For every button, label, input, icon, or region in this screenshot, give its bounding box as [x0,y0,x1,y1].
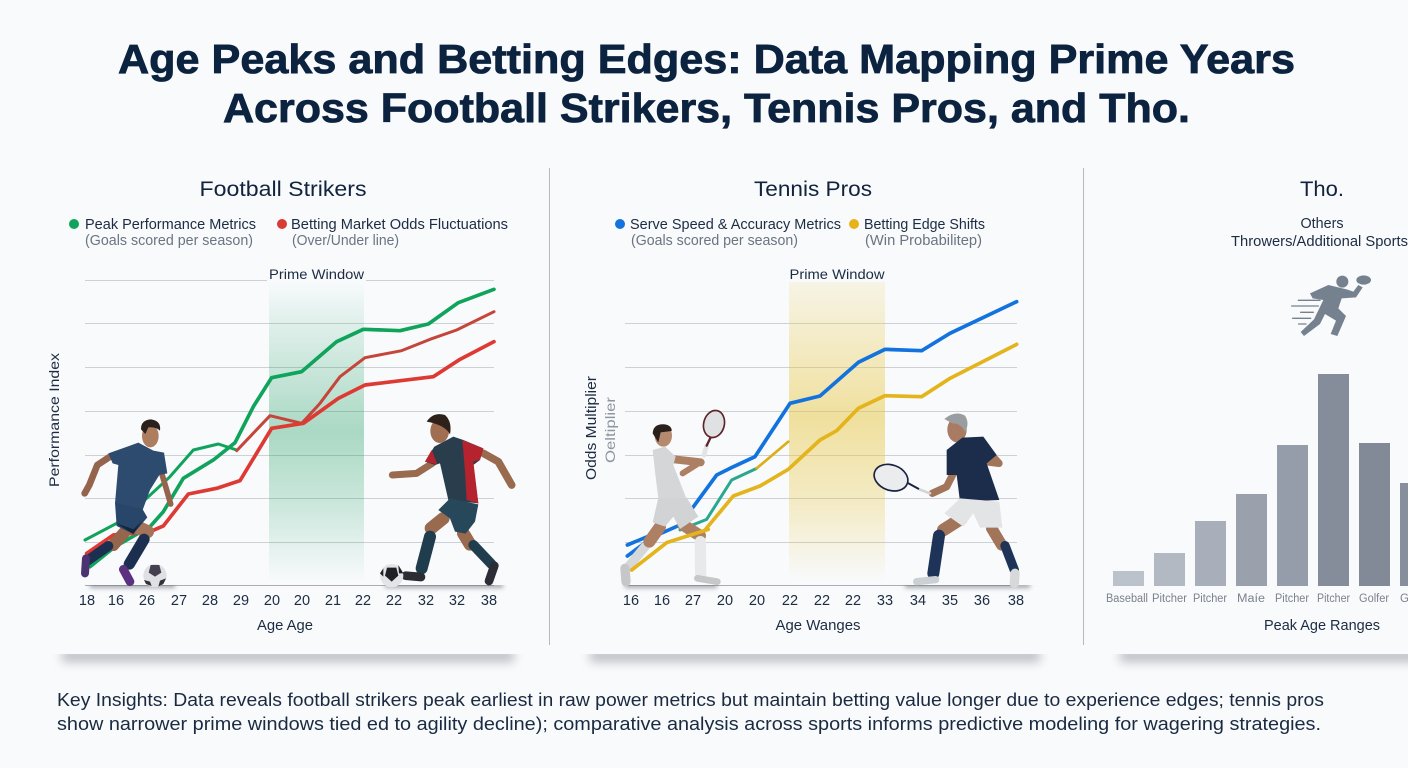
x axis ticks: football: 26 [139,593,155,609]
player: right striker [392,414,512,581]
legend: football: Peak Performance Metrics [85,217,256,233]
legend: football: (Goals scored per season) [85,233,253,249]
x axis ticks: tennis [623,593,1024,609]
legend: tennis: Betting Edge Shifts [864,217,985,233]
x axis ticks: football: 21 [325,593,341,609]
player: veteran tennis pro [870,413,1015,583]
legend: football: (Over/Under line) [292,233,399,249]
gridlines [625,324,1017,586]
x axis ticks: tennis: 16 [654,593,670,609]
bar labels: Baseball [1106,593,1148,605]
x axis title: peak age ranges: Peak Age Ranges [1264,618,1380,634]
bar labels: Pitcher [1152,593,1187,605]
legend: tennis: (Goals scored per season) [631,233,798,249]
player: young tennis pro [625,408,727,582]
bar chart: peak age ranges [1113,374,1408,586]
title: Across Football Strikers, Tennis Pros, and Tho. [223,85,1190,131]
panel: tennis pros [584,178,1040,662]
x axis ticks: football [79,593,497,609]
x axis ticks: football: 38 [481,593,497,609]
x axis ticks: tennis: 22 [845,593,861,609]
x axis ticks: football: 32 [449,593,465,609]
legend: tennis [615,217,985,249]
x axis ticks: tennis: 36 [974,593,990,609]
heading: tennis pros: Tennis Pros [754,178,872,201]
x axis ticks: tennis: 27 [685,593,701,609]
title [118,36,1295,131]
panel: football strikers [46,178,514,662]
y axis label: performance index: Performance Index [46,353,62,487]
x axis ticks: football: 22 [386,593,402,609]
x axis ticks: tennis: 20 [749,593,765,609]
legend: tennis: (Win Probabilitep) [865,233,982,249]
icon: soccer ball left [143,564,167,587]
x axis ticks: tennis: 22 [782,593,798,609]
icon: running thrower [1292,275,1371,336]
player: left striker [85,419,171,582]
x axis title: tennis: Age Wanges [776,618,860,634]
x axis ticks: tennis: 35 [942,593,958,609]
prime window band [789,282,885,582]
ground shadows: tennis [625,582,1030,588]
heading: football strikers: Football Strikers [200,178,366,201]
line chart: football [85,289,494,567]
x axis ticks: tennis: 22 [814,593,830,609]
legend: football [69,217,508,249]
prime window label: Prime Window [269,266,365,282]
x axis ticks: tennis: 34 [910,593,926,609]
y axis ghost label: Oeltiplier [602,397,618,463]
bar labels: Maíe [1237,593,1265,605]
x axis title: football: Age Age [257,618,313,634]
heading: tho.: Tho. [1300,178,1344,201]
legend: tennis: Serve Speed & Accuracy Metrics [630,217,841,233]
bar labels: Pitcher [1193,593,1227,605]
line overlay: yellow over shin [632,529,708,570]
key insights: show narrower prime windows tied ed to agility decline); comparative analysis across sports informs predictive modeling for wagering strategies. [57,714,1321,734]
x axis ticks: tennis: 33 [877,593,893,609]
x axis ticks: football: 16 [108,593,124,609]
title: Age Peaks and Betting Edges: Data Mapping Prime Years [118,36,1295,82]
icon: soccer ball right [380,564,403,587]
x axis ticks: football: 27 [171,593,187,609]
key insights: Key Insights: Data reveals football strikers peak earliest in raw power metrics but maintain betting value longer due to experience edges; tennis pros [57,690,1324,710]
x axis ticks: tennis: 20 [717,593,733,609]
subheading: others: Others [1300,216,1344,232]
x axis ticks: football: 20 [264,593,280,609]
x axis ticks: football: 32 [418,593,434,609]
bar labels: Pitcher [1317,593,1350,605]
prime window label: Prime Window [790,266,885,282]
bar labels: Golfer [1359,593,1389,605]
ground shadows: football [90,582,503,588]
subheading: throwers: Throwers/Additional Sports [1231,234,1408,250]
x axis ticks: football: 22 [355,593,371,609]
y axis label: odds multiplier: Odds Multiplier [584,376,600,480]
legend: football: Betting Market Odds Fluctuations [291,217,508,233]
x axis ticks: tennis: 16 [623,593,639,609]
key insights [57,690,1324,734]
panel: throwers and others [1106,178,1408,662]
bar labels [1106,593,1408,605]
gridlines [85,280,494,586]
line chart: tennis [627,302,1017,556]
x axis ticks: football: 29 [233,593,249,609]
x axis ticks: football: 20 [294,593,310,609]
prime window band [269,282,364,582]
x axis ticks: football: 28 [202,593,218,609]
x axis ticks: football: 18 [79,593,95,609]
panel shadow [590,650,1040,662]
bar labels: Pitcher [1275,593,1309,605]
panel shadow [1120,650,1408,662]
x axis ticks: tennis: 38 [1008,593,1024,609]
panel shadow [62,650,514,662]
